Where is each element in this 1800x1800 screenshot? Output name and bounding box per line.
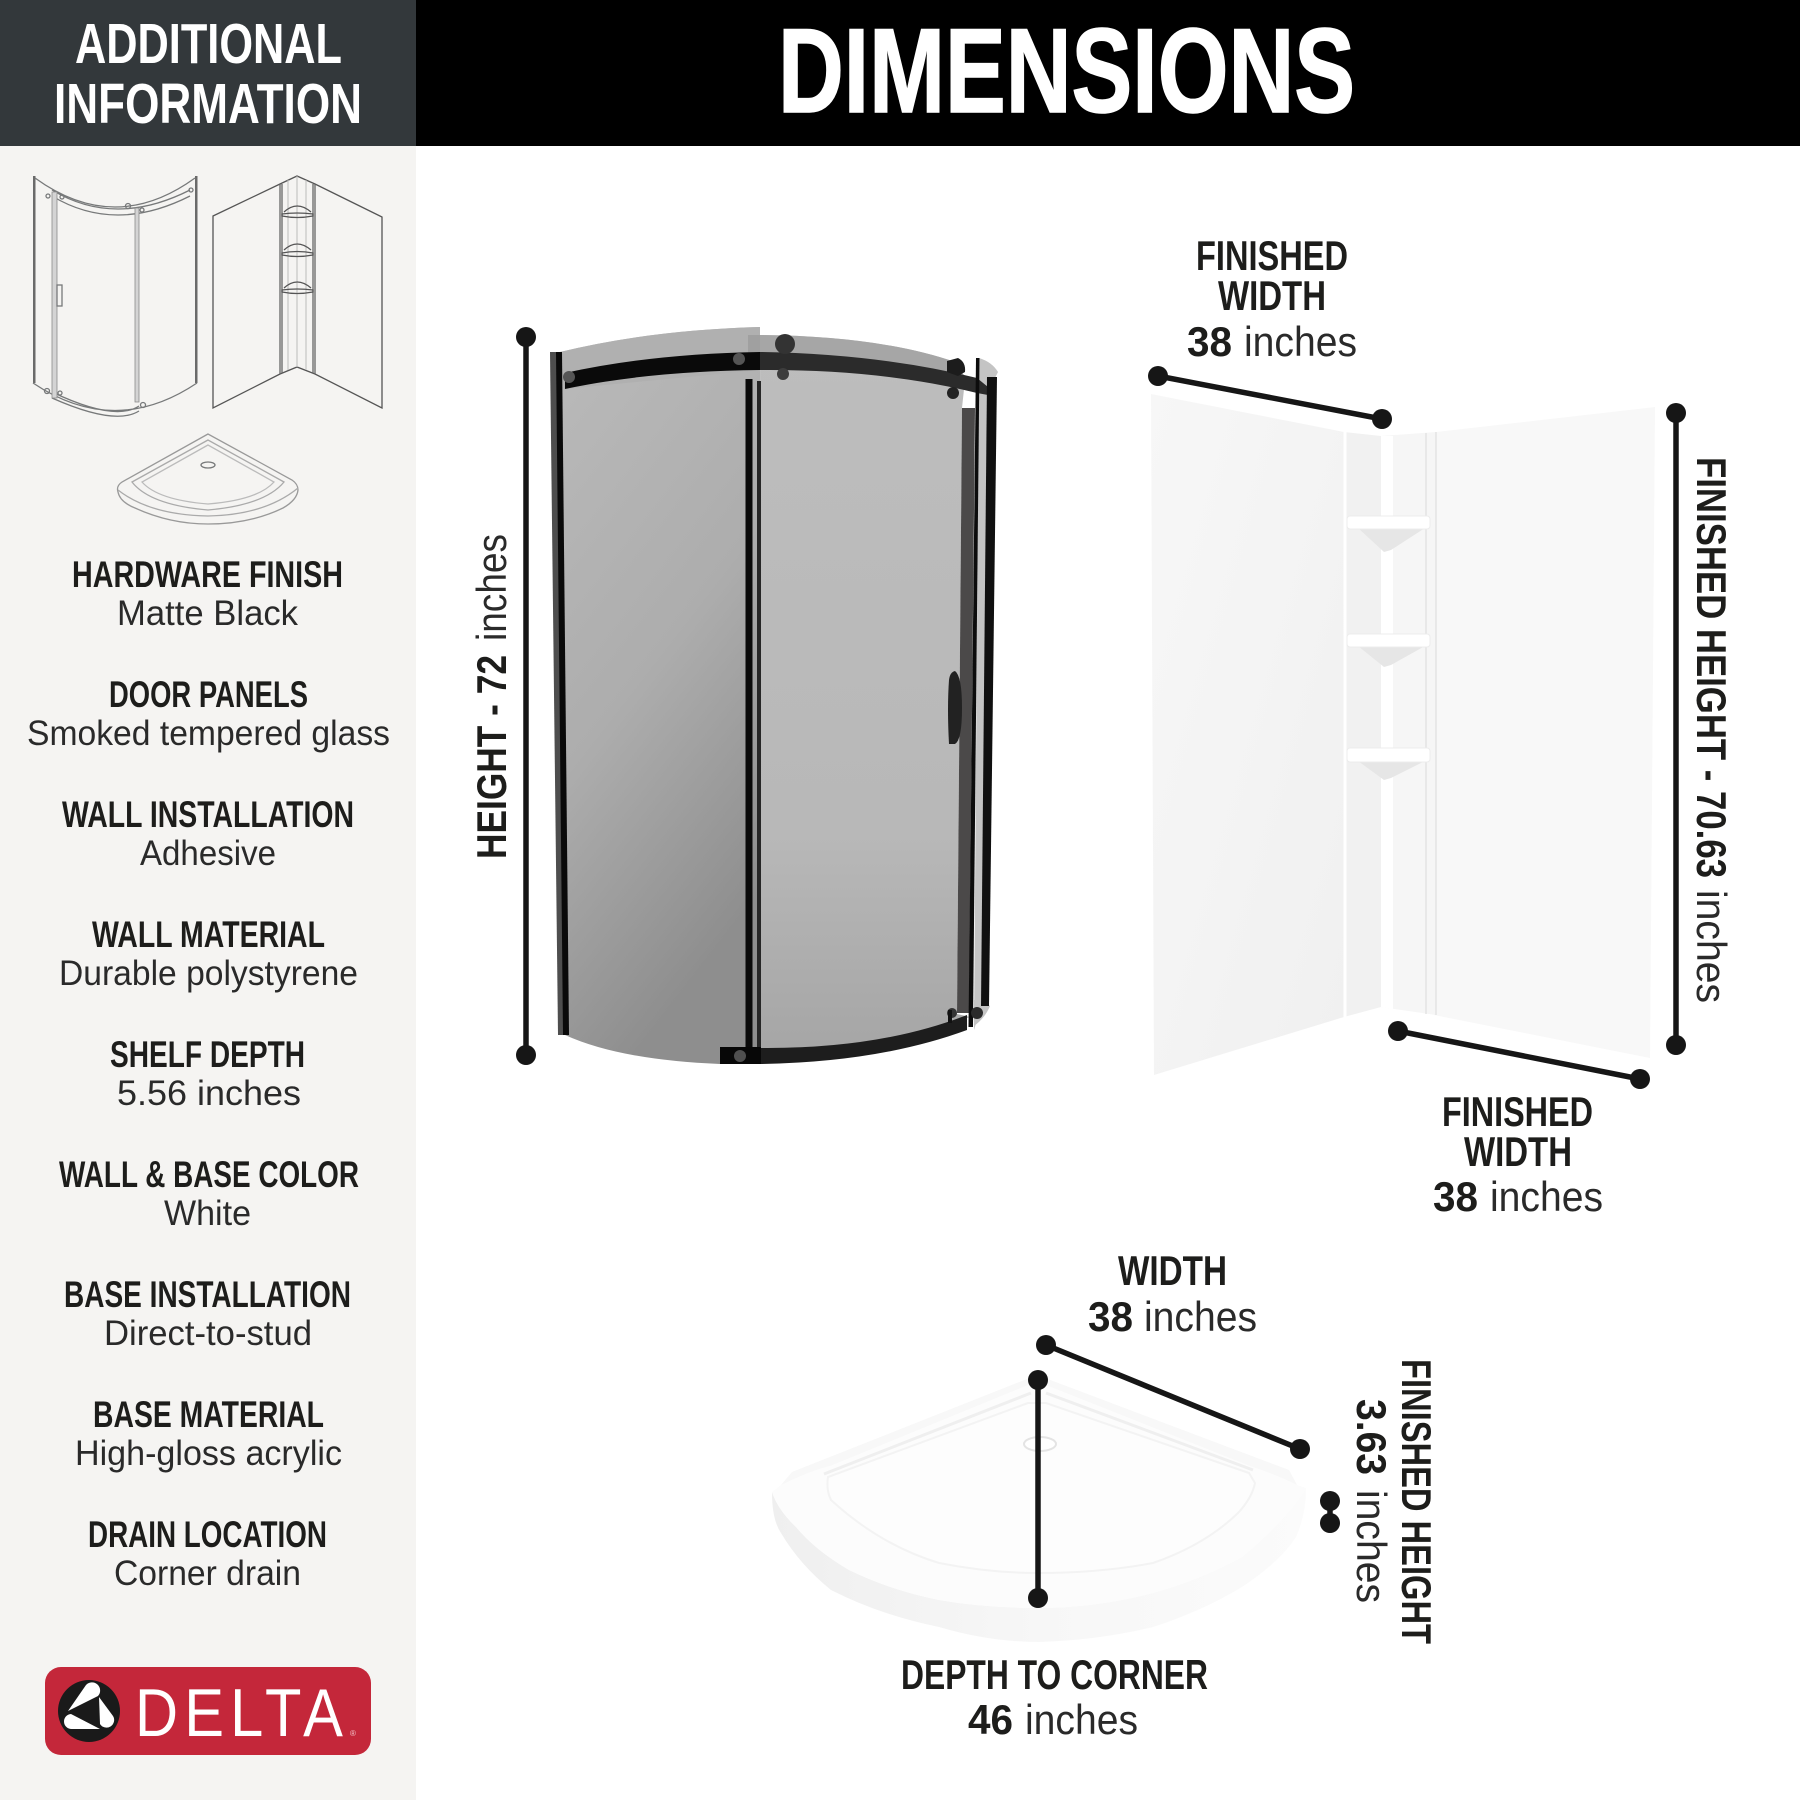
spec: hardware finish bbox=[72, 554, 343, 633]
label: base height value: 3.63 bbox=[1348, 1399, 1395, 1475]
dimension: depth to corner line bbox=[1028, 1370, 1048, 1608]
label: bottom finished width: FINISHED bbox=[1442, 1088, 1593, 1135]
dimension: base width line bbox=[1036, 1335, 1310, 1459]
right glass bbox=[760, 335, 970, 1048]
spec: shelf depth: SHELF DEPTH bbox=[110, 1034, 305, 1075]
label: top finished width: WIDTH bbox=[1218, 272, 1326, 319]
spec: base installation bbox=[64, 1274, 351, 1353]
header: additional information: INFORMATION bbox=[54, 72, 362, 136]
label: base height value bbox=[1348, 1399, 1395, 1603]
label: top finished width: FINISHED bbox=[1196, 232, 1348, 279]
spec: base material: High-gloss acrylic bbox=[75, 1434, 342, 1473]
dimension: finished height line bbox=[1666, 403, 1686, 1055]
spec: wall installation: WALL INSTALLATION bbox=[62, 794, 354, 835]
label: finished height 70.63 inches: inches bbox=[1688, 890, 1735, 1003]
dimension: bottom finished width line bbox=[1388, 1021, 1650, 1089]
left post bbox=[550, 352, 565, 1035]
top glass shade bbox=[560, 327, 760, 389]
door edge panel bbox=[957, 408, 975, 1013]
spec: drain location: Corner drain bbox=[114, 1554, 301, 1593]
spec: base material bbox=[75, 1394, 342, 1473]
spec: wall and base color: White bbox=[164, 1194, 251, 1233]
label: depth to corner: DEPTH TO CORNER bbox=[901, 1651, 1208, 1698]
label: base width bbox=[1088, 1247, 1257, 1340]
spec: door panels: Smoked tempered glass bbox=[27, 714, 390, 753]
top rail bbox=[565, 352, 760, 389]
dimension: base height marker bbox=[1320, 1491, 1340, 1533]
spec: drain location: DRAIN LOCATION bbox=[88, 1514, 327, 1555]
spec: wall and base color bbox=[59, 1154, 359, 1233]
spec: hardware finish: HARDWARE FINISH bbox=[72, 554, 343, 595]
spec: wall material: WALL MATERIAL bbox=[92, 914, 325, 955]
skirt bbox=[772, 1488, 1306, 1642]
label: base width: inches bbox=[1144, 1293, 1257, 1340]
spec: shelf depth bbox=[110, 1034, 305, 1113]
label: bottom finished width: 38 bbox=[1433, 1173, 1478, 1220]
icon: wall panels line drawing bbox=[213, 176, 382, 408]
rollers bbox=[563, 371, 575, 383]
spec: wall and base color: WALL & BASE COLOR bbox=[59, 1154, 359, 1195]
icon: shower base line drawing bbox=[118, 434, 298, 524]
label: top finished width: 38 bbox=[1187, 318, 1232, 365]
header: dimensions title bbox=[416, 0, 1800, 146]
header: additional information: ADDITIONAL bbox=[75, 12, 342, 76]
spec: wall installation: Adhesive bbox=[140, 834, 276, 873]
handle bbox=[948, 671, 962, 744]
label: bottom finished width: WIDTH bbox=[1464, 1128, 1572, 1175]
header: dimensions title: DIMENSIONS bbox=[778, 4, 1355, 138]
label: depth to corner: inches bbox=[1025, 1696, 1138, 1743]
logo: delta bbox=[45, 1667, 371, 1755]
spec: base installation: Direct-to-stud bbox=[104, 1314, 312, 1353]
illustration: shower door bbox=[550, 327, 998, 1064]
label: top finished width bbox=[1187, 232, 1357, 365]
spec: base installation: BASE INSTALLATION bbox=[64, 1274, 351, 1315]
spec: shelf depth: 5.56 inches bbox=[117, 1074, 301, 1113]
right glass strip bbox=[974, 358, 998, 1030]
spec: door panels bbox=[27, 674, 390, 753]
label: finished height 70.63 inches: FINISHED HEIGHT - 70.63 bbox=[1688, 457, 1735, 878]
label: base width: WIDTH bbox=[1118, 1247, 1227, 1294]
left glass bbox=[560, 327, 760, 1064]
label: bottom finished width: inches bbox=[1490, 1173, 1603, 1220]
spec: wall material bbox=[59, 914, 358, 993]
spec: hardware finish: Matte Black bbox=[117, 594, 298, 633]
label: bottom finished width bbox=[1433, 1088, 1603, 1220]
center bars bbox=[746, 379, 752, 1047]
dimension: top finished width line bbox=[1148, 366, 1392, 429]
spec: wall installation bbox=[62, 794, 354, 873]
illustration: wall panels bbox=[1151, 394, 1655, 1075]
dimension: shower height line bbox=[516, 327, 536, 1065]
logo: delta: DELTA bbox=[135, 1675, 349, 1751]
spec: wall material: Durable polystyrene bbox=[59, 954, 358, 993]
label: depth to corner: 46 bbox=[968, 1696, 1013, 1743]
top rim bbox=[772, 1375, 1306, 1608]
label: height 72 inches: inches bbox=[468, 534, 515, 641]
drain bbox=[1024, 1437, 1056, 1451]
illustration: shower base bbox=[772, 1375, 1306, 1642]
recess bbox=[827, 1403, 1255, 1573]
label: height 72 inches: HEIGHT - 72 bbox=[468, 655, 515, 859]
label: base finished height: FINISHED HEIGHT bbox=[1393, 1359, 1440, 1644]
panel: sidebar background bbox=[0, 146, 416, 1800]
label: base height value: inches bbox=[1348, 1490, 1395, 1603]
label: top finished width: inches bbox=[1244, 318, 1357, 365]
header: additional information bbox=[0, 0, 416, 146]
icon: shower door line drawing bbox=[33, 176, 198, 416]
label: base width: 38 bbox=[1088, 1293, 1133, 1340]
spec: door panels: DOOR PANELS bbox=[109, 674, 308, 715]
label: depth to corner bbox=[901, 1651, 1208, 1743]
spec: base material: BASE MATERIAL bbox=[93, 1394, 324, 1435]
bottom rail bbox=[761, 1015, 967, 1064]
spec: drain location bbox=[88, 1514, 327, 1593]
logo: delta: ® bbox=[350, 1729, 356, 1738]
